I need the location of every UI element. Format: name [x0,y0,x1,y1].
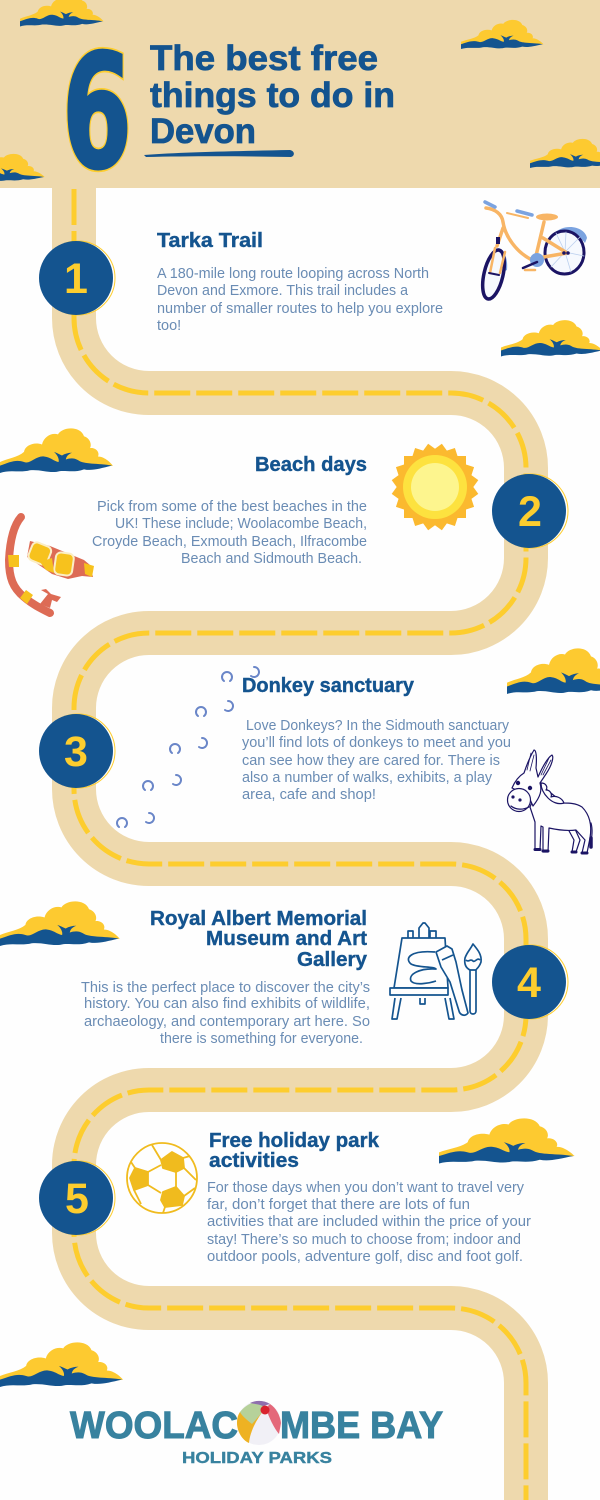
step 2 badge: 2 [518,488,542,536]
step 1 text: too! [157,318,181,334]
title: The best free [150,39,378,78]
step 1 text: Devon and Exmore. This trail includes a [157,283,409,299]
road [74,185,526,1500]
cloud: bottom left [0,1342,123,1387]
step 4 text: This is the perfect place to discover the city’s [81,980,370,996]
step 1 text [157,266,443,334]
step 4 badge: 4 [517,959,541,1007]
logo [70,1401,443,1467]
icon: easel and brushes [390,923,481,1019]
step 5 text [207,1180,531,1265]
step 5 text: outdoor pools, adventure golf, disc and foot golf. [207,1249,523,1265]
step 1 heading: Tarka Trail [157,230,263,252]
logo: MBE BAY [280,1405,443,1447]
cloud: museum left [0,901,120,946]
title underline [144,150,294,157]
step 3 text: can see how they are cared for. There is [242,753,500,769]
step 4 heading: Museum and Art [206,928,367,950]
step 5 badge: 5 [65,1175,89,1223]
header band [0,0,600,188]
step 3 text: also a number of walks, exhibits, a play [242,770,493,786]
title: things to do in [150,76,395,115]
step 1 badge [39,241,115,315]
step 1 text: A 180-mile long route looping across North [157,266,429,282]
cloud: header top right [461,20,543,49]
cloud: header left [0,154,45,182]
step 2 text: Croyde Beach, Exmouth Beach, Ilfracombe [92,534,367,550]
step 1 badge: 1 [64,255,88,303]
step 5 text: far, don’t forget that there are lots of fun [207,1197,470,1213]
icon: bicycle [479,202,587,301]
step 2 text [92,499,367,567]
step 3 text: Love Donkeys? In the Sidmouth sanctuary [246,718,510,734]
logo: WOOLAC [70,1405,238,1447]
icon: snorkel and mask [8,517,94,613]
step 5 heading: activities [209,1150,299,1172]
step 4 heading: Gallery [297,949,368,971]
cloud: beach left [0,428,113,473]
cloud: holiday park right [439,1118,575,1164]
icon: hoof prints [117,667,259,827]
big number six: 6 [62,21,132,205]
step 4 badge [492,945,568,1019]
logo: HOLIDAY PARKS [182,1450,332,1467]
step 5 text: activities that are included within the price of your [207,1214,531,1230]
step 4 heading: Royal Albert Memorial [150,908,367,930]
step 3 text: you’ll find lots of donkeys to meet and you [242,735,511,751]
icon: sun [392,444,478,530]
step 4 text: archaeology, and contemporary art here. So [84,1014,370,1030]
step 5 heading: Free holiday park [209,1130,380,1152]
step 3 heading: Donkey sanctuary [242,675,415,697]
icon: donkey [508,750,592,853]
big number six: 6 [62,21,132,205]
cloud: beside bike [501,320,600,356]
step 5 badge [39,1161,115,1235]
step 3 badge [39,714,115,788]
step 5 text: For those days when you don’t want to travel very [207,1180,525,1196]
step 4 heading [150,908,368,971]
title [150,39,395,151]
step 2 text: UK! These include; Woolacombe Beach, [115,516,367,532]
step 1 text: number of smaller routes to help you explore [157,301,443,317]
step 5 text: stay! There’s so much to choose from; indoor and [207,1232,521,1248]
icon: football [127,1143,197,1213]
step 3 text: area, cafe and shop! [242,787,376,803]
icon: beach ball [237,1401,281,1445]
cloud: header top left [20,0,104,27]
step 4 text [81,980,370,1047]
step 2 text: Beach and Sidmouth Beach. [181,551,362,567]
step 3 badge: 3 [64,728,88,776]
step 5 heading [209,1130,380,1172]
cloud: header right [530,139,600,168]
step 2 heading: Beach days [255,454,367,476]
title: Devon [150,112,256,151]
cloud: donkey right [507,648,600,694]
step 4 text: history. You can also find exhibits of wildlife, [84,996,370,1012]
big number six [62,21,132,205]
step 2 text: Pick from some of the best beaches in the [97,499,367,515]
step 2 badge [492,474,568,548]
step 4 text: there is something for everyone. [160,1031,363,1047]
step 3 text [242,718,511,803]
